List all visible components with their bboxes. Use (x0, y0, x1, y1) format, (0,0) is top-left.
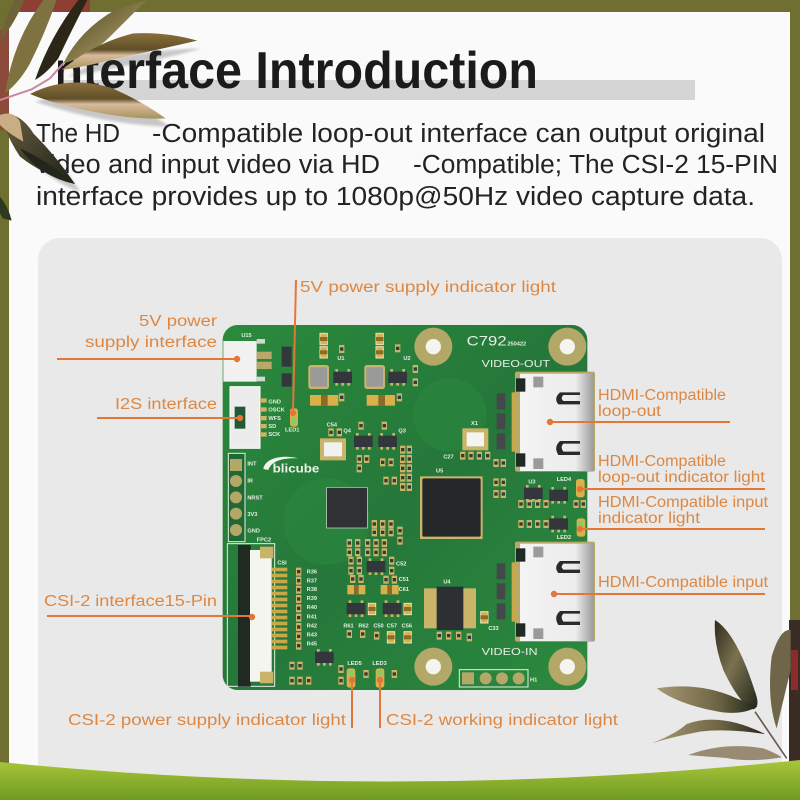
callout labels: HDMI-Compatible (598, 387, 726, 404)
board silkscreen: INT (247, 462, 257, 468)
board silkscreen: C27 (443, 454, 454, 460)
callout labels (44, 279, 769, 729)
callout labels: 5V power (139, 313, 217, 330)
board silkscreen: WFS (268, 416, 281, 422)
board silkscreen: GND (268, 399, 281, 405)
board silkscreen: U3 (528, 479, 536, 485)
board silkscreen: X1 (471, 421, 478, 427)
board silkscreen: R43 (307, 633, 317, 639)
board silkscreen: U2 (403, 356, 411, 362)
leaves: bottom right (652, 620, 791, 760)
CSI connector (227, 544, 287, 687)
I2S connector (230, 387, 267, 448)
small components (282, 333, 586, 685)
board silkscreen: SCK (268, 432, 281, 438)
board silkscreen: H1 (530, 678, 537, 684)
board silkscreen: 3V3 (247, 512, 257, 518)
board silkscreen: R39 (307, 596, 317, 602)
description text: -Compatible; The CSI-2 15-PIN (413, 151, 778, 179)
chip U5 (420, 476, 483, 539)
leader lines (47, 280, 765, 728)
callout labels: CSI-2 working indicator light (386, 712, 619, 729)
callout labels: loop-out indicator light (598, 469, 766, 486)
board silkscreen: C50 (373, 624, 384, 630)
description text (36, 120, 778, 211)
HDMI input connector (512, 542, 595, 642)
board silkscreen: R41 (307, 614, 317, 620)
board silkscreen: R37 (307, 578, 317, 584)
board silkscreen: NRST (247, 495, 263, 501)
callout labels: HDMI-Compatible (598, 453, 726, 470)
callout labels: 5V power supply indicator light (300, 279, 557, 296)
title: Interface Introduction (40, 42, 538, 100)
board silkscreen: Q4 (343, 429, 352, 435)
board silkscreen: 250422 (507, 342, 526, 348)
board silkscreen: Q3 (398, 428, 406, 434)
green ground strip (0, 760, 800, 800)
callout labels: CSI-2 interface15-Pin (44, 593, 217, 610)
board silkscreen: C792 (467, 333, 507, 349)
board silkscreen: C57 (387, 624, 397, 630)
callout labels: HDMI-Compatible input (598, 574, 769, 591)
board silkscreen: IR (247, 478, 253, 484)
power connector (223, 339, 272, 382)
board silkscreen: R38 (307, 587, 317, 593)
callout labels: loop-out (598, 403, 662, 420)
description text: video and input video via HD (36, 151, 380, 179)
header pads (228, 453, 245, 542)
board silkscreen: C54 (327, 423, 338, 429)
inductors (308, 365, 385, 389)
callout labels: supply interface (85, 334, 217, 351)
callout labels: I2S interface (115, 396, 217, 413)
board silkscreen: U4 (443, 579, 451, 585)
board silkscreen: U15 (241, 333, 252, 339)
HDMI loop-out connector (512, 372, 595, 472)
board silkscreen: LED4 (557, 477, 572, 483)
board silkscreen: OSCK (268, 408, 286, 414)
board silkscreen: LED2 (557, 535, 571, 541)
callout labels: CSI-2 power supply indicator light (68, 712, 347, 729)
chip U6 (327, 487, 367, 528)
chip U4 (424, 587, 476, 630)
callout labels: indicator light (598, 510, 701, 527)
board silkscreen: R45 (307, 642, 317, 648)
board silkscreen: U5 (436, 469, 443, 475)
board silkscreen: blicube (273, 462, 320, 476)
board silkscreen: C61 (399, 587, 409, 593)
description text: The HD (36, 120, 120, 148)
board silkscreen: R61 (343, 624, 354, 630)
board silkscreen: R40 (307, 605, 317, 611)
board silkscreen: C52 (396, 562, 406, 568)
callout labels: HDMI-Compatible input (598, 494, 769, 511)
description text: -Compatible loop-out interface can output original (152, 120, 765, 148)
crystals (320, 428, 488, 460)
H1 header (459, 670, 528, 687)
board silkscreen: SD (268, 424, 276, 430)
description text: interface provides up to 1080p@50Hz video capture data. (36, 183, 755, 211)
board silkscreen: FPC2 (257, 538, 271, 544)
board silkscreen: VIDEO-OUT (482, 359, 550, 370)
board silkscreen: R42 (307, 624, 317, 630)
board silkscreen: R62 (358, 624, 369, 630)
board silkscreen: CSI (277, 560, 287, 566)
board silkscreen: C51 (399, 577, 409, 583)
circuit board (223, 325, 595, 690)
board silkscreen: C56 (402, 624, 412, 630)
board silkscreen (241, 333, 572, 684)
board silkscreen: LED1 (285, 428, 299, 434)
panel: board diagram background (38, 238, 782, 784)
board silkscreen: R36 (307, 569, 317, 575)
board silkscreen: VIDEO-IN (482, 647, 538, 658)
board silkscreen: LED5 (347, 661, 362, 667)
leaves: top left (0, 0, 202, 221)
board silkscreen: LED3 (372, 661, 387, 667)
board silkscreen: GND (247, 528, 260, 534)
LEDs (290, 408, 585, 688)
board silkscreen: U1 (337, 356, 345, 362)
mounting holes (414, 328, 586, 686)
board silkscreen: C33 (488, 626, 499, 632)
